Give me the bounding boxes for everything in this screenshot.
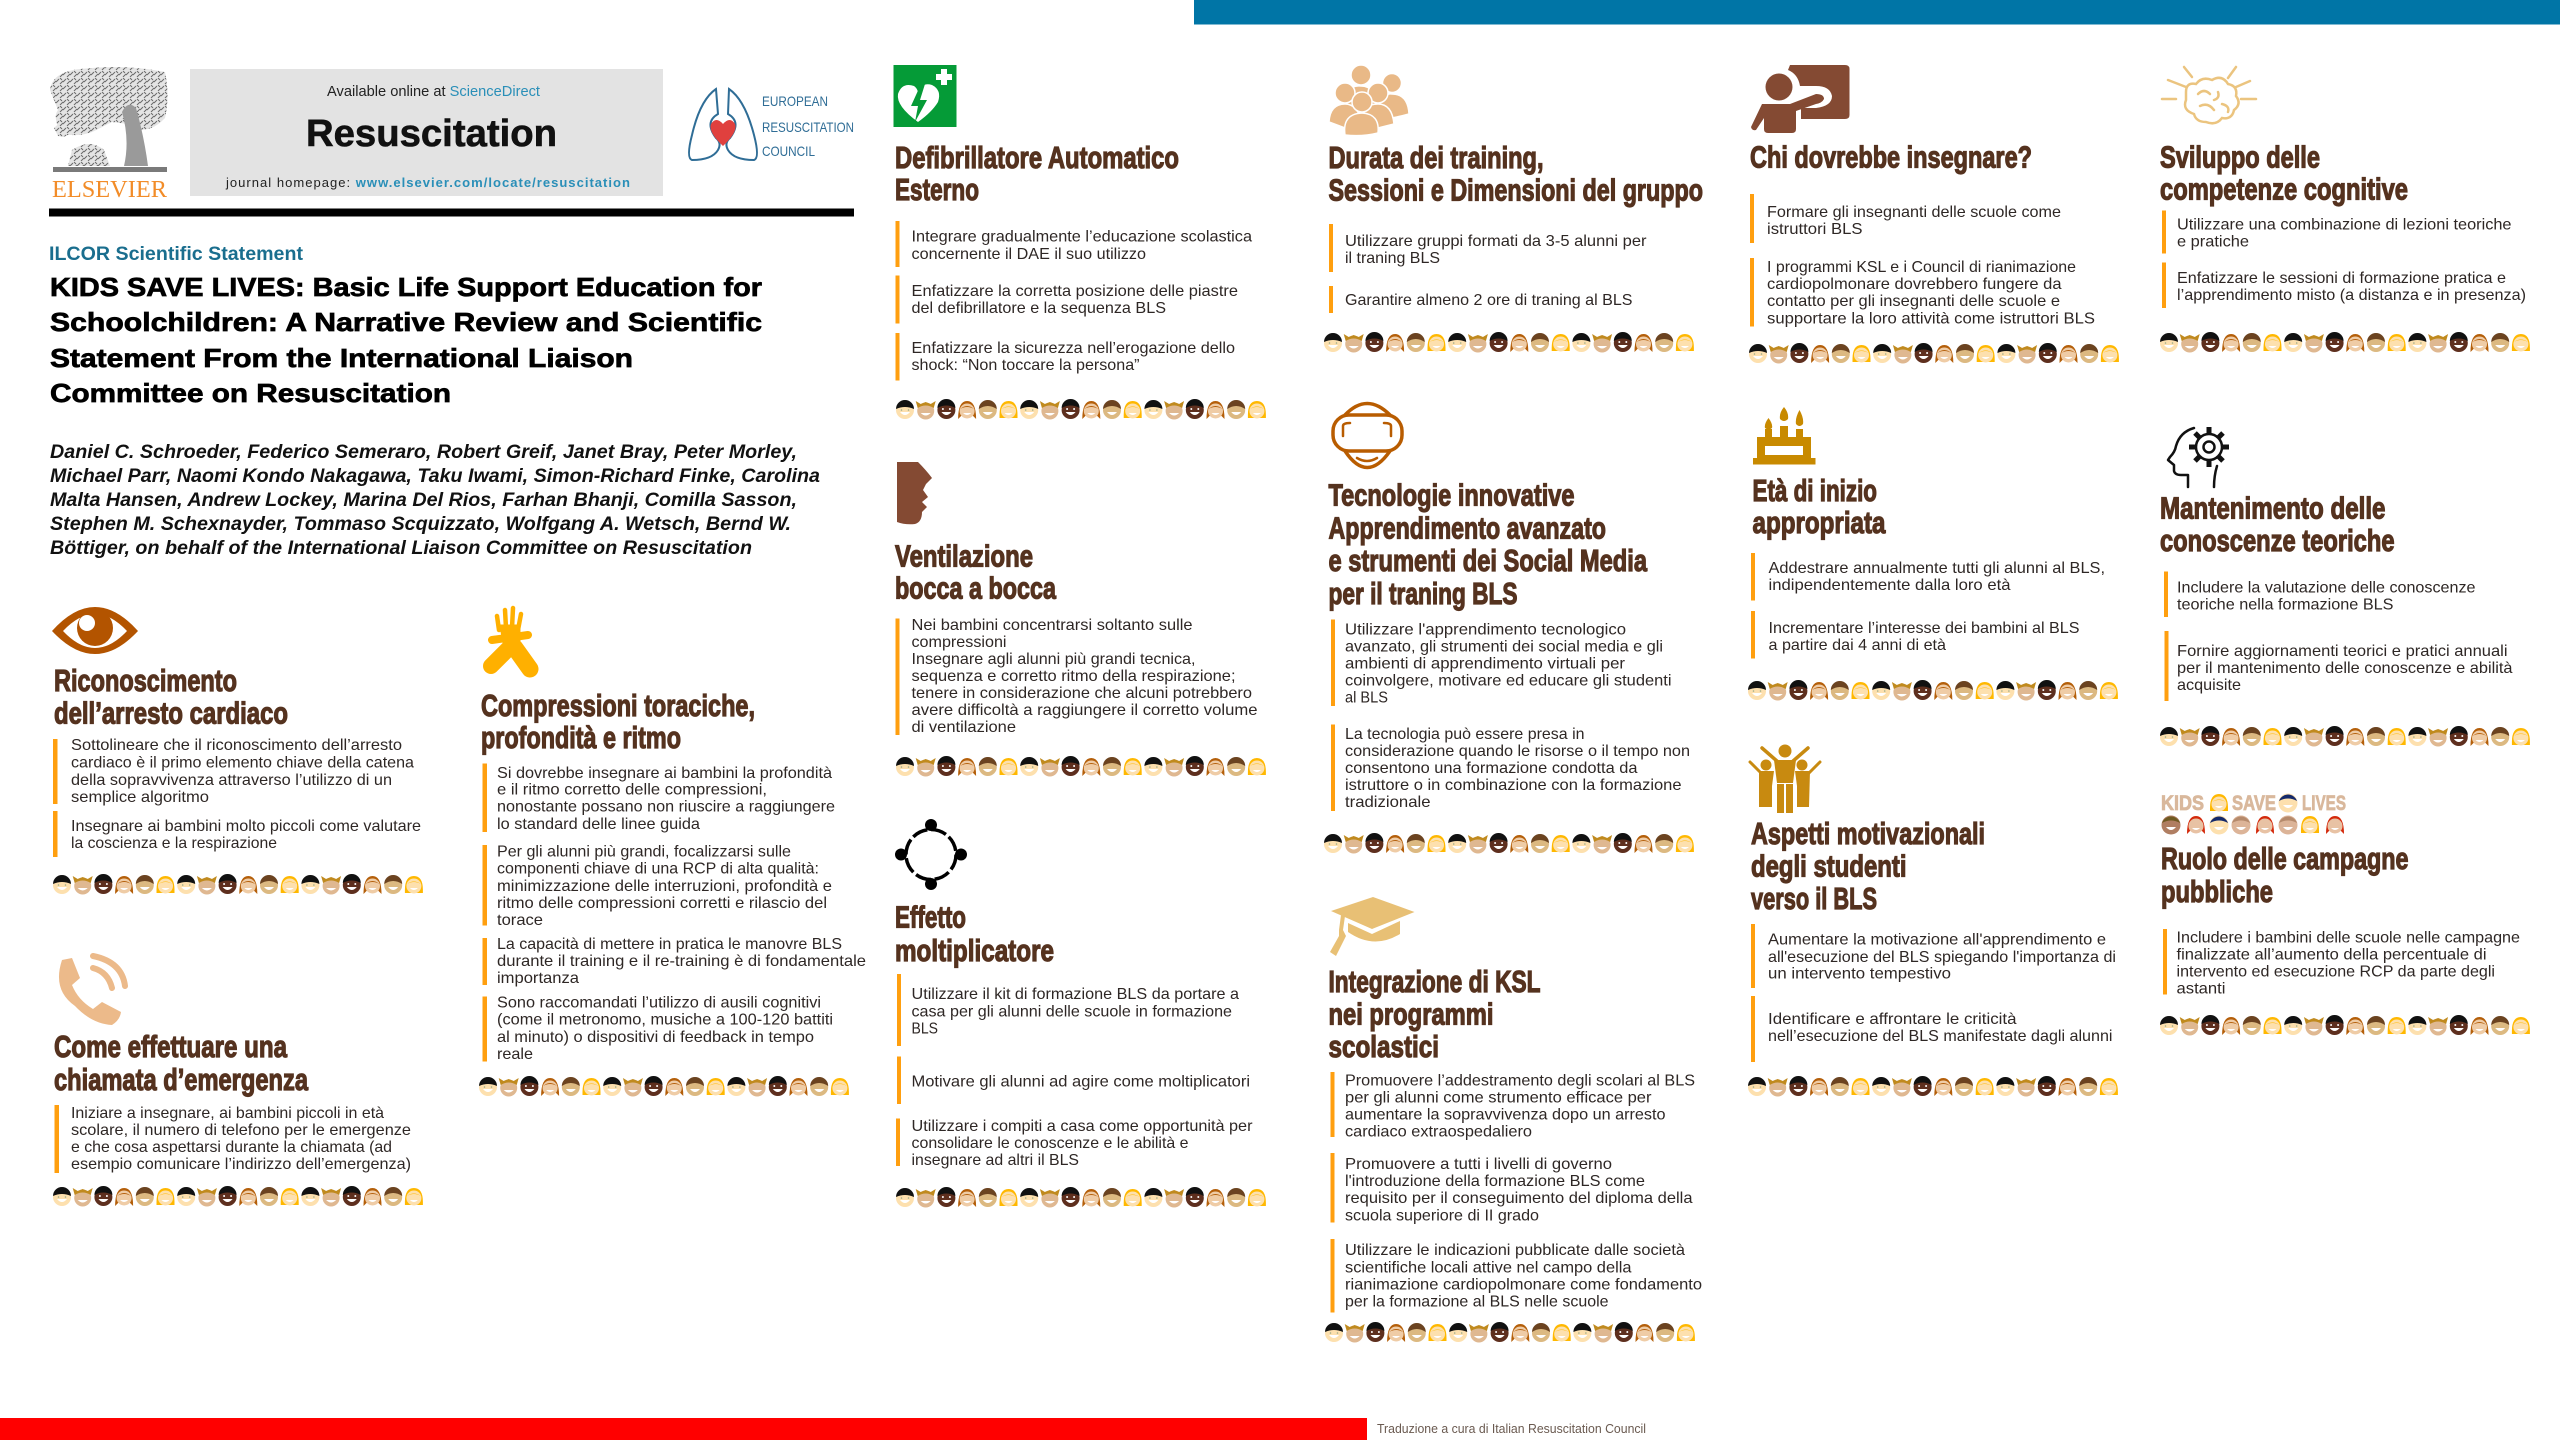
bullet: aumentare la sopravvivenza dopo un arresto (1345, 1106, 1666, 1124)
faces row (2160, 332, 2530, 352)
logo: Kids Save Lives: LIVES (2302, 792, 2346, 815)
bullet: Utilizzare gruppi formati da 3-5 alunni per (1345, 233, 1647, 250)
heading: Sviluppo delle (2160, 140, 2320, 174)
authors: Michael Parr, Naomi Kondo Nakagawa, Taku Iwami, Simon-Richard Finke, Carolina (50, 466, 820, 487)
panel: aspetti motivazionali (1748, 744, 2118, 1096)
bullet (896, 221, 1252, 267)
bullet: esempio comunicare l’indirizzo dell’emergenza) (71, 1156, 411, 1173)
icon: mouth profile (897, 462, 932, 524)
bullet: per gli alunni come strumento efficace per (1345, 1090, 1652, 1106)
icon: group of people (1329, 65, 1409, 136)
panel: effetto moltiplicatore (895, 819, 1266, 1208)
authors: Stephen M. Schexnayder, Tommaso Scquizzato, Wolfgang A. Wetsch, Bernd W. (50, 514, 791, 535)
bullet: Utilizzare il kit di formazione BLS da portare a (912, 986, 1239, 1003)
bullet: la coscienza e la respirazione (71, 835, 277, 852)
bullet: La tecnologia può essere presa in (1345, 726, 1584, 743)
heading: Tecnologie innovative (1328, 478, 1574, 512)
bullet (482, 994, 833, 1063)
bullet: avere difficoltà a raggiungere il corretto volume (912, 702, 1258, 719)
bullet: compressioni (912, 634, 1006, 651)
faces row (896, 1187, 1266, 1208)
panel: chi dovrebbe insegnare (1749, 65, 2119, 364)
faces row (1324, 332, 1694, 352)
bullet (2162, 210, 2512, 254)
bullet: La capacità di mettere in pratica le manovre BLS (497, 936, 842, 953)
bullet: componenti chiave di una RCP di alta qualità: (497, 860, 819, 878)
bullet (2164, 631, 2513, 701)
bullet: Motivare gli alunni ad agire come moltiplicatori (912, 1074, 1250, 1090)
bullet: di ventilazione (912, 719, 1016, 736)
bullet: Identificare e affrontare le criticità (1768, 1011, 2017, 1028)
bullet: Utilizzare l'apprendimento tecnologico (1345, 622, 1626, 638)
bullet (2164, 572, 2476, 617)
bullet: Sottolineare che il riconoscimento dell’arresto (71, 737, 402, 754)
bullet: Fornire aggiornamenti teorici e pratici annuali (2177, 643, 2508, 660)
heading: Integrazione di KSL (1328, 964, 1540, 999)
heading: Come effettuare una (54, 1029, 288, 1064)
bullet: teoriche nella formazione BLS (2177, 596, 2394, 614)
journal banner: Available online at ScienceDirect (327, 83, 541, 100)
bullet: consolidare le conoscenze e le abilità e (912, 1135, 1189, 1152)
bullet: Promuovere l’addestramento degli scolari al BLS (1345, 1072, 1695, 1090)
bullet: e il ritmo corretto delle compressioni, (497, 782, 767, 798)
faces row (1749, 343, 2119, 364)
bullet (1331, 620, 1672, 706)
heading (2160, 140, 2408, 206)
icon: multiplier ring (895, 819, 967, 890)
icon: head with gear (2168, 427, 2229, 487)
faces row (53, 874, 423, 894)
bullet (1330, 1239, 1702, 1312)
bullet: Per gli alunni più grandi, focalizzarsi sulle (497, 844, 791, 860)
heading (2160, 490, 2394, 558)
bullet: importanza (497, 970, 579, 987)
bullet: Insegnare agli alunni più grandi tecnica, (912, 651, 1196, 668)
bullet: Includere la valutazione delle conoscenze (2177, 580, 2476, 596)
logo: Kids Save Lives (2161, 792, 2346, 834)
heading: Durata dei training, (1328, 140, 1544, 175)
heading: appropriata (1752, 505, 1886, 540)
journal header (50, 67, 854, 203)
faces row (896, 756, 1266, 776)
bullet: il traning BLS (1345, 250, 1440, 267)
heading (1328, 140, 1703, 208)
journal banner: Resuscitation (306, 113, 557, 155)
icon: hands (491, 608, 530, 669)
bullet (896, 1118, 1253, 1169)
title (50, 272, 762, 408)
heading: e strumenti dei Social Media (1328, 543, 1648, 578)
heading (895, 538, 1057, 606)
panel: ruolo delle campagne pubbliche (2160, 792, 2530, 1036)
logo: European Resuscitation Council: COUNCIL (762, 143, 815, 159)
panel: tecnologie innovative (1324, 404, 1694, 854)
logo: Elsevier (50, 67, 168, 203)
icon: phone (59, 956, 125, 1025)
bullet (54, 1105, 411, 1173)
bullet: astanti (2176, 980, 2226, 998)
bullet (1330, 1153, 1693, 1224)
faces row (1748, 1076, 2118, 1096)
bullet: sequenza e corretto ritmo della respirazione; (912, 668, 1236, 685)
faces row (53, 1186, 423, 1206)
bullet: insegnare ad altri il BLS (912, 1152, 1079, 1169)
icon: brain (2162, 67, 2256, 123)
bullet (1751, 553, 2105, 600)
panel: chiamata d'emergenza (53, 956, 423, 1206)
heading (54, 1029, 309, 1097)
bullet: all'esecuzione del BLS spiegando l'importanza di (1768, 949, 2116, 966)
heading: Aspetti motivazionali (1751, 816, 1985, 851)
bullet: Utilizzare una combinazione di lezioni teoriche (2177, 216, 2512, 234)
bullet: lo standard delle linee guida (497, 816, 700, 833)
panel: defibrillatore (894, 65, 1266, 420)
bullet: rianimazione cardiopolmonare come fondamento (1345, 1276, 1702, 1294)
footer credit: Traduzione a cura di Italian Resuscitation Council (1377, 1421, 1646, 1436)
title: KIDS SAVE LIVES: Basic Life Support Education for (50, 272, 762, 302)
bullet: (come il metronomo, musiche a 100-120 battiti (497, 1012, 833, 1028)
icon: birthday cake (1753, 407, 1816, 464)
bullet: Enfatizzare la sicurezza nell’erogazione dello (912, 340, 1235, 357)
bullet: Formare gli insegnanti delle scuole come (1767, 204, 2061, 221)
bullet: Nei bambini concentrarsi soltanto sulle (912, 617, 1193, 634)
title: Statement From the International Liaison (50, 343, 633, 373)
bullet: Integrare gradualmente l’educazione scolastica (912, 228, 1252, 246)
bullet: Si dovrebbe insegnare ai bambini la profondità (497, 765, 832, 782)
bullet: al BLS (1345, 690, 1388, 706)
bullet (896, 276, 1238, 324)
bullet: l'introduzione della formazione BLS come (1345, 1173, 1645, 1190)
journal banner (190, 69, 663, 196)
faces row (2160, 726, 2530, 746)
bullet: scolare, il numero di telefono per le emergenze (71, 1122, 411, 1139)
bullet: nonostante possano non riuscire a raggiungere (497, 798, 835, 816)
bullet (1750, 194, 2061, 243)
heading: Esterno (895, 172, 979, 207)
bullet: Garantire almeno 2 ore di traning al BLS (1345, 292, 1632, 309)
faces row (479, 1076, 849, 1096)
heading (1328, 478, 1648, 611)
faces row (1748, 680, 2118, 700)
bullet: Sono raccomandati l’utilizzo di ausili cognitivi (497, 994, 821, 1012)
heading (1752, 473, 1886, 540)
journal banner: journal homepage: www.elsevier.com/locate/resuscitation (225, 175, 631, 190)
bullet: cardiaco extraospedaliero (1345, 1124, 1532, 1140)
heading (1751, 816, 1985, 916)
bullet: durante il training e il re-training è di fondamentale (497, 953, 866, 970)
panel: mantenimento conoscenze (2160, 427, 2530, 746)
heading (481, 688, 755, 755)
authors: Daniel C. Schroeder, Federico Semeraro, Robert Greif, Janet Bray, Peter Morley, (50, 442, 797, 463)
bullet (1751, 996, 2112, 1062)
bullet: I programmi KSL e i Council di rianimazione (1767, 259, 2076, 276)
bullet: un intervento tempestivo (1768, 966, 1951, 982)
icon: eye (52, 607, 138, 654)
bullet (482, 936, 866, 987)
bullet: torace (497, 912, 543, 929)
bullet: Aumentare la motivazione all'apprendimento e (1768, 932, 2106, 948)
panel: riconoscimento dell'arresto cardiaco (52, 607, 423, 894)
faces row (1324, 833, 1694, 854)
bullet: BLS (912, 1020, 938, 1038)
bullet (2163, 929, 2520, 998)
bullet (1331, 724, 1690, 811)
top blue bar (1194, 0, 2560, 24)
black header rule (49, 208, 854, 216)
heading: scolastici (1328, 1029, 1439, 1064)
bullet: istruttori BLS (1767, 221, 1862, 238)
bullet (482, 764, 835, 833)
heading: Defibrillatore Automatico (895, 140, 1179, 175)
bullet: tradizionale (1345, 794, 1431, 811)
bullet: intervento ed esecuzione RCP da parte degli (2176, 964, 2495, 980)
bullet: avanzato, gli strumenti dei social media e gli (1345, 638, 1663, 656)
panel: sviluppo competenze cognitive (2160, 67, 2530, 352)
bullet: supportare la loro attività come istruttori BLS (1767, 310, 2095, 328)
bullet (1750, 258, 2095, 328)
bullet: cardiaco è il primo elemento chiave della catena (71, 754, 414, 772)
bullet: concernente il DAE il suo utilizzo (912, 246, 1146, 263)
bullet: finalizzate all’aumento della percentuale di (2176, 946, 2486, 964)
panel: compressioni toraciche (479, 608, 866, 1096)
heading: moltiplicatore (895, 933, 1054, 968)
heading: Riconoscimento (54, 663, 237, 698)
bullet: casa per gli alunni delle scuole in formazione (912, 1004, 1232, 1020)
bullet: e pratiche (2177, 234, 2249, 250)
bullet: semplice algoritmo (71, 789, 209, 806)
panel: integrazione KSL (1325, 897, 1702, 1342)
heading: degli studenti (1751, 848, 1906, 884)
bullet: al minuto) o dispositivi di feedback in tempo (497, 1029, 814, 1046)
heading: bocca a bocca (895, 570, 1057, 606)
heading: conoscenze teoriche (2160, 523, 2394, 558)
bullet: Utilizzare i compiti a casa come opportunità per (912, 1118, 1253, 1135)
logo: Kids Save Lives: KIDS (2161, 792, 2204, 815)
bullet: per il mantenimento delle conoscenze e abilità (2177, 660, 2513, 677)
icon: graduation cap (1330, 897, 1414, 956)
bullet: Enfatizzare le sessioni di formazione pratica e (2177, 270, 2506, 287)
heading (895, 900, 1054, 968)
authors: Malta Hansen, Andrew Lockey, Marina Del Rios, Farhan Bhanji, Comilla Sasson, (50, 490, 797, 511)
bullet: Utilizzare le indicazioni pubblicate dalle società (1345, 1242, 1685, 1259)
heading: Chi dovrebbe insegnare? (1750, 140, 2032, 174)
bullet: per la formazione al BLS nelle scuole (1345, 1294, 1609, 1310)
logo: Elsevier: ELSEVIER (52, 177, 167, 203)
heading: Compressioni toraciche, (481, 688, 755, 723)
bullet (896, 333, 1235, 380)
bullet: minimizzazione delle interruzioni, profondità e (497, 878, 832, 895)
bullet (53, 737, 414, 806)
bullet (2162, 262, 2526, 308)
bullet (53, 811, 421, 857)
bullet: contatto per gli insegnanti delle scuole e (1767, 293, 2060, 310)
bullet: shock: “Non toccare la persona” (912, 357, 1140, 374)
bullet (897, 1056, 1250, 1104)
bullet: Addestrare annualmente tutti gli alunni al BLS, (1768, 560, 2105, 577)
panel: durata dei training (1324, 65, 1703, 352)
heading (1328, 964, 1540, 1064)
bullet: Includere i bambini delle scuole nelle campagne (2176, 930, 2520, 946)
bullet: Enfatizzare la corretta posizione delle piastre (912, 283, 1238, 300)
bullet: coinvolgere, motivare ed educare gli studenti (1345, 672, 1672, 690)
logo: European Resuscitation Council (689, 89, 854, 160)
authors (50, 442, 820, 559)
title: Committee on Resuscitation (50, 378, 451, 408)
bullet (1330, 1072, 1695, 1140)
bullet: l’apprendimento misto (a distanza e in presenza) (2177, 287, 2526, 304)
icon: teacher at board (1751, 65, 1850, 133)
heading: profondità e ritmo (481, 720, 681, 755)
bullet (1329, 224, 1647, 272)
bullet: Insegnare ai bambini molto piccoli come valutare (71, 818, 421, 835)
bullet (1329, 286, 1632, 313)
bullet: Incrementare l’interesse dei bambini al BLS (1768, 620, 2080, 637)
heading: nei programmi (1328, 996, 1494, 1032)
logo: European Resuscitation Council: RESUSCITATION (762, 119, 854, 135)
bullet: consentono una formazione condotta da (1345, 760, 1638, 777)
icon: AED (894, 65, 956, 127)
title: Schoolchildren: A Narrative Review and Scientific (50, 307, 762, 337)
heading: Ruolo delle campagne (2161, 841, 2408, 876)
heading: Apprendimento avanzato (1328, 510, 1606, 546)
bullet: della sopravvivenza attraverso l’utilizzo di un (71, 772, 392, 789)
heading: Mantenimento delle (2160, 490, 2386, 526)
heading (895, 140, 1179, 207)
bullet: a partire dai 4 anni di età (1768, 637, 1946, 654)
bullet (1751, 611, 2080, 658)
bullet: cardiopolmonare dovrebbero fungere da (1767, 276, 2062, 293)
bullet: requisito per il conseguimento del diploma della (1345, 1190, 1693, 1207)
bullet: reale (497, 1046, 533, 1063)
bullet: scuola superiore di II grado (1345, 1208, 1539, 1224)
bottom red bar (0, 1418, 1367, 1440)
authors: Böttiger, on behalf of the International Liaison Committee on Resuscitation (50, 538, 752, 559)
bullet: tenere in considerazione che alcuni potrebbero (912, 685, 1252, 702)
logo: European Resuscitation Council: EUROPEAN (762, 93, 828, 109)
bullet: acquisite (2177, 677, 2241, 694)
bullet: indipendentemente dalla loro età (1768, 577, 2011, 594)
heading (2161, 841, 2408, 909)
heading: Sessioni e Dimensioni del gruppo (1328, 172, 1703, 208)
heading: Età di inizio (1752, 473, 1877, 508)
panel: ventilazione bocca a bocca (895, 462, 1266, 776)
statement label: ILCOR Scientific Statement (49, 244, 304, 265)
bullet: e che cosa aspettarsi durante la chiamata (ad (71, 1139, 392, 1156)
heading: verso il BLS (1751, 881, 1877, 916)
bullet: Promuovere a tutti i livelli di governo (1345, 1156, 1612, 1173)
heading (54, 663, 288, 730)
faces row (1325, 1322, 1695, 1342)
heading: dell’arresto cardiaco (54, 696, 288, 730)
logo: Kids Save Lives: SAVE (2232, 792, 2276, 815)
faces row (2160, 1015, 2530, 1036)
bullet (482, 844, 832, 929)
heading: chiamata d’emergenza (54, 1062, 309, 1097)
bullet (896, 617, 1258, 736)
heading: competenze cognitive (2160, 172, 2408, 206)
heading: Ventilazione (895, 538, 1033, 574)
heading: per il traning BLS (1328, 576, 1518, 611)
faces row (896, 399, 1266, 420)
panel: età di inizio (1748, 407, 2118, 700)
bullet: istruttore o in combinazione con la formazione (1345, 777, 1682, 794)
heading: pubbliche (2161, 874, 2273, 909)
bullet (1751, 924, 2116, 988)
bullet (897, 974, 1239, 1046)
bullet: Iniziare a insegnare, ai bambini piccoli in età (71, 1105, 384, 1122)
bullet: del defibrillatore e la sequenza BLS (912, 300, 1166, 317)
bullet: nell’esecuzione del BLS manifestate dagli alunni (1768, 1028, 2112, 1045)
icon: VR headset (1333, 404, 1402, 468)
heading: Effetto (895, 900, 966, 934)
bullet: ritmo delle compressioni corretti e rilascio del (497, 895, 827, 912)
icon: cheering kids (1750, 744, 1820, 813)
bullet: scientifiche locali attive nel campo della (1345, 1260, 1632, 1276)
bullet: considerazione quando le risorse o il tempo non (1345, 743, 1690, 760)
bullet: ambienti di apprendimento virtuali per (1345, 656, 1626, 672)
